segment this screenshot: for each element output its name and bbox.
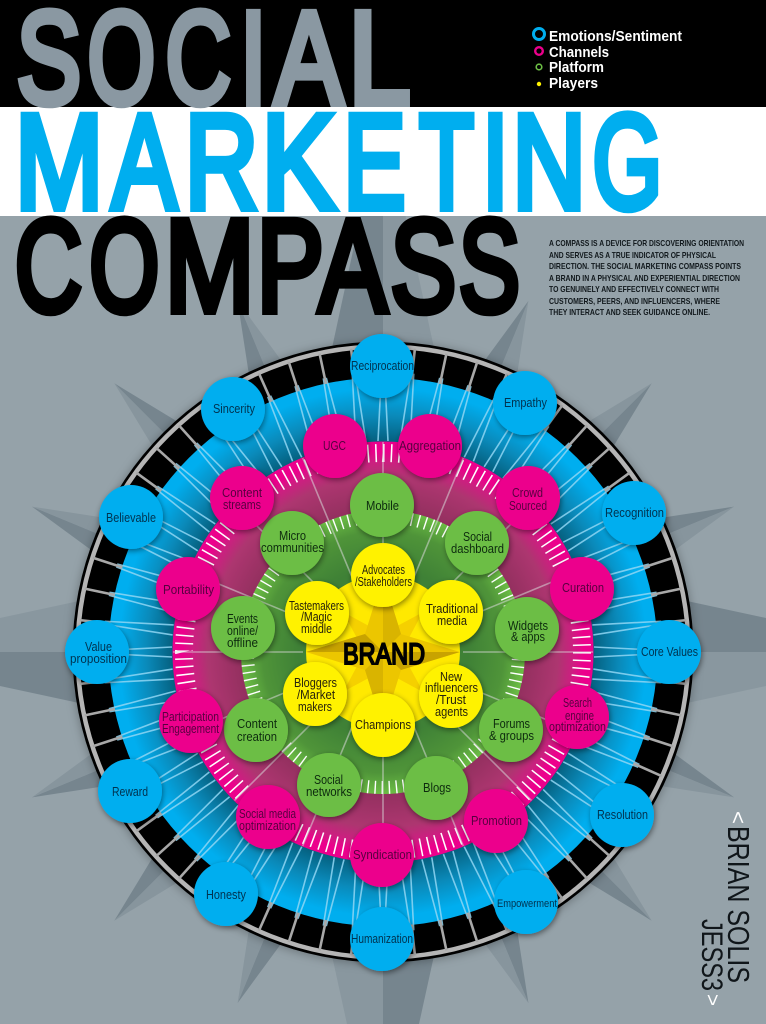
platform: Micro communities: communities xyxy=(261,540,324,555)
channel: Syndication: Syndication xyxy=(353,847,412,862)
title: MARKETING: G xyxy=(592,88,662,237)
platform: Blogs: Blogs xyxy=(423,780,451,795)
pink ring xyxy=(172,442,594,862)
credit: Brian Solis: BRIAN SOLIS xyxy=(721,826,756,983)
channel: Aggregation: Aggregation xyxy=(399,438,461,453)
blue ring xyxy=(108,378,658,926)
emotion: Reward xyxy=(98,759,162,823)
green ring xyxy=(241,510,525,794)
emotion: Resolution: Resolution xyxy=(597,807,648,822)
player: Bloggers: /Market xyxy=(297,687,335,702)
channel: Participation Engagement xyxy=(159,689,223,753)
channel: Search engine optimization xyxy=(545,685,609,749)
platform: Social dashboard: Social xyxy=(463,529,492,544)
emotion: Recognition xyxy=(602,481,666,545)
legend: platform: Platform xyxy=(549,60,604,76)
player: Advocates/Stakeholders: /Stakeholders xyxy=(355,574,412,589)
emotion: Reciprocation: Reciprocation xyxy=(351,358,414,373)
channel: Search engine optimization: engine xyxy=(565,708,594,723)
emotion: Believable: Believable xyxy=(106,510,156,525)
emotion: Core Values: Core Values xyxy=(641,644,698,659)
title: COMPASS: A xyxy=(319,192,387,339)
radial spokes xyxy=(173,442,593,862)
emotion: Reciprocation xyxy=(350,334,414,398)
intro paragraph xyxy=(549,239,744,317)
title: MARKETING: N xyxy=(512,88,586,237)
emotion: Sincerity xyxy=(201,377,265,441)
player: Advocates/Stakeholders: Advocates xyxy=(362,562,405,577)
credit: bracket open: < xyxy=(726,811,749,824)
platform: Forums and groups: & groups xyxy=(489,728,534,743)
channel: Content streams: Content xyxy=(222,485,262,500)
platform: Events online/offline: Events xyxy=(227,611,258,626)
player: New influencers: agents xyxy=(435,704,468,719)
emotion: Value proposition: Value xyxy=(85,639,112,654)
channel: Search engine optimization: optimization xyxy=(549,719,606,734)
emotion: Empowerment: Empowerment xyxy=(497,898,557,910)
platform: Micro communities xyxy=(260,511,324,575)
player: Champions: Champions xyxy=(355,717,411,732)
channel: Portability xyxy=(156,557,220,621)
intro paragraph: CUSTOMERS, PEERS, AND INFLUENCERS, WHERE xyxy=(549,297,720,306)
players: yellow circles xyxy=(283,543,483,757)
title: MARKETING: R xyxy=(185,88,258,237)
legend: emotions: Emotions/Sentiment xyxy=(549,29,682,45)
platform: Widgets and apps xyxy=(495,597,559,661)
channel: Participation Engagement: Participation xyxy=(162,709,219,724)
emotion: Humanization: Humanization xyxy=(351,931,413,946)
green ring ticks xyxy=(248,516,518,788)
channel: Social media optimization: Social media xyxy=(239,806,297,821)
platform: Social networks: networks xyxy=(306,784,352,799)
radial ticks: outer ring and blue ring xyxy=(55,324,711,980)
channel: Promotion xyxy=(464,789,528,853)
channel: Curation: Curation xyxy=(562,580,604,595)
channel: Social media optimization: optimization xyxy=(239,818,296,833)
title: MARKETING: K xyxy=(262,88,335,237)
title: MARKETING: T xyxy=(419,88,474,237)
platform: Social dashboard xyxy=(445,511,509,575)
channel: Participation Engagement: Engagement xyxy=(162,721,219,736)
platform: Content creation xyxy=(224,698,288,762)
title: COMPASS: O xyxy=(90,192,159,339)
player: Advocates/Stakeholders xyxy=(351,543,415,607)
pink ring ticks xyxy=(184,453,582,851)
platform: Forums and groups xyxy=(479,698,543,762)
central yellow star xyxy=(303,572,463,732)
platform: Widgets and apps: & apps xyxy=(511,629,545,644)
emotion: Empathy xyxy=(493,371,557,435)
player: Bloggers: Bloggers xyxy=(294,675,337,690)
platform: Mobile: Mobile xyxy=(366,498,399,513)
platform: Content creation: Content xyxy=(237,716,277,731)
channel: Content streams: streams xyxy=(223,497,261,512)
channel: Crowd Sourced xyxy=(496,466,560,530)
title: MARKETING: A xyxy=(112,88,177,237)
title: MARKETING: I xyxy=(482,88,508,237)
channel: Social media optimization xyxy=(236,785,300,849)
platform: Content creation: creation xyxy=(237,729,277,744)
emotion: Sincerity: Sincerity xyxy=(213,401,255,416)
player: Tastemakers xyxy=(285,581,349,645)
emotion: Recognition: Recognition xyxy=(605,505,664,520)
emotions: blue circles xyxy=(65,334,701,971)
player: Traditional media: Traditional xyxy=(426,601,478,616)
platform: Social networks xyxy=(297,753,361,817)
title: MARKETING: E xyxy=(344,88,406,237)
platform: Mobile xyxy=(350,473,414,537)
emotion: Honesty xyxy=(194,862,258,926)
title: COMPASS: S xyxy=(391,192,456,339)
title: MARKETING: M xyxy=(15,88,103,237)
legend: channels: Channels xyxy=(549,45,609,61)
legend xyxy=(534,28,682,92)
intro paragraph: THEY INTERACT AND SEEK GUIDANCE ONLINE. xyxy=(549,308,710,317)
channel: Curation xyxy=(550,557,614,621)
compass dial xyxy=(55,324,711,980)
emotion: Humanization xyxy=(350,907,414,971)
title: COMPASS: P xyxy=(257,192,324,339)
platform: Social networks: Social xyxy=(314,772,343,787)
channel: Crowd Sourced: Crowd xyxy=(512,485,543,500)
platforms: green circles xyxy=(211,473,559,820)
player: Traditional media: media xyxy=(437,613,468,628)
emotion: Believable xyxy=(99,485,163,549)
credit: JESS3: JESS3 xyxy=(695,919,728,991)
center label: BRAND: BRAND xyxy=(343,638,425,671)
black outer ring xyxy=(72,342,694,962)
emotion: Resolution xyxy=(590,783,654,847)
channel: UGC: UGC xyxy=(323,438,346,453)
player: New influencers: influencers xyxy=(425,680,478,695)
emotion: Honesty: Honesty xyxy=(206,887,246,902)
title: COMPASS: C xyxy=(15,192,82,339)
emotion: Reward: Reward xyxy=(112,784,148,799)
header band: white xyxy=(0,107,766,216)
emotion: Empathy: Empathy xyxy=(504,395,547,410)
channel: Crowd Sourced: Sourced xyxy=(509,498,547,513)
channel: Promotion: Promotion xyxy=(471,813,522,828)
platform: Widgets and apps: Widgets xyxy=(508,618,548,633)
platform: Events online/offline: online/ xyxy=(227,623,258,638)
title: COMPASS: M xyxy=(165,192,254,339)
platform: Micro communities: Micro xyxy=(279,528,306,543)
emotion: Value proposition: proposition xyxy=(70,651,127,666)
credits xyxy=(695,811,756,1006)
player: New influencers: /Trust xyxy=(436,692,466,707)
channel: Portability: Portability xyxy=(163,582,214,597)
platform: Events online/offline: offline xyxy=(227,635,258,650)
channels: pink circles xyxy=(156,414,614,887)
player: Tastemakers: middle xyxy=(301,621,332,636)
platform: Blogs xyxy=(404,756,468,820)
channel: Search engine optimization: Search xyxy=(563,695,592,710)
player: Bloggers xyxy=(283,662,347,726)
player: Traditional media xyxy=(419,580,483,644)
channel: Syndication xyxy=(350,823,414,887)
platform: Social dashboard: dashboard xyxy=(451,541,504,556)
emotion: Core Values xyxy=(637,620,701,684)
channel: Aggregation xyxy=(398,414,462,478)
emotion: Empowerment xyxy=(494,870,558,934)
player: Tastemakers: Tastemakers xyxy=(289,598,344,613)
player: Tastemakers: /Magic xyxy=(301,609,332,624)
emotion: Value proposition xyxy=(65,620,129,684)
channel: UGC xyxy=(303,414,367,478)
legend: players: Players xyxy=(549,76,598,92)
player: New influencers xyxy=(419,664,483,728)
player: Bloggers: makers xyxy=(298,699,332,714)
header band: black xyxy=(0,0,766,107)
player: Champions xyxy=(351,693,415,757)
credit: bracket close: > xyxy=(701,994,723,1006)
intro paragraph: AND SERVES AS A TRUE INDICATOR OF PHYSICAL xyxy=(549,251,716,260)
platform: Events online/offline xyxy=(211,596,275,660)
intro paragraph: TO GENUINELY AND EFFECTIVELY CONNECT WITH xyxy=(549,285,719,294)
player: New influencers: New xyxy=(440,669,463,684)
platform: Forums and groups: Forums xyxy=(493,716,530,731)
title: COMPASS: S xyxy=(459,192,520,339)
channel: Content streams xyxy=(210,466,274,530)
